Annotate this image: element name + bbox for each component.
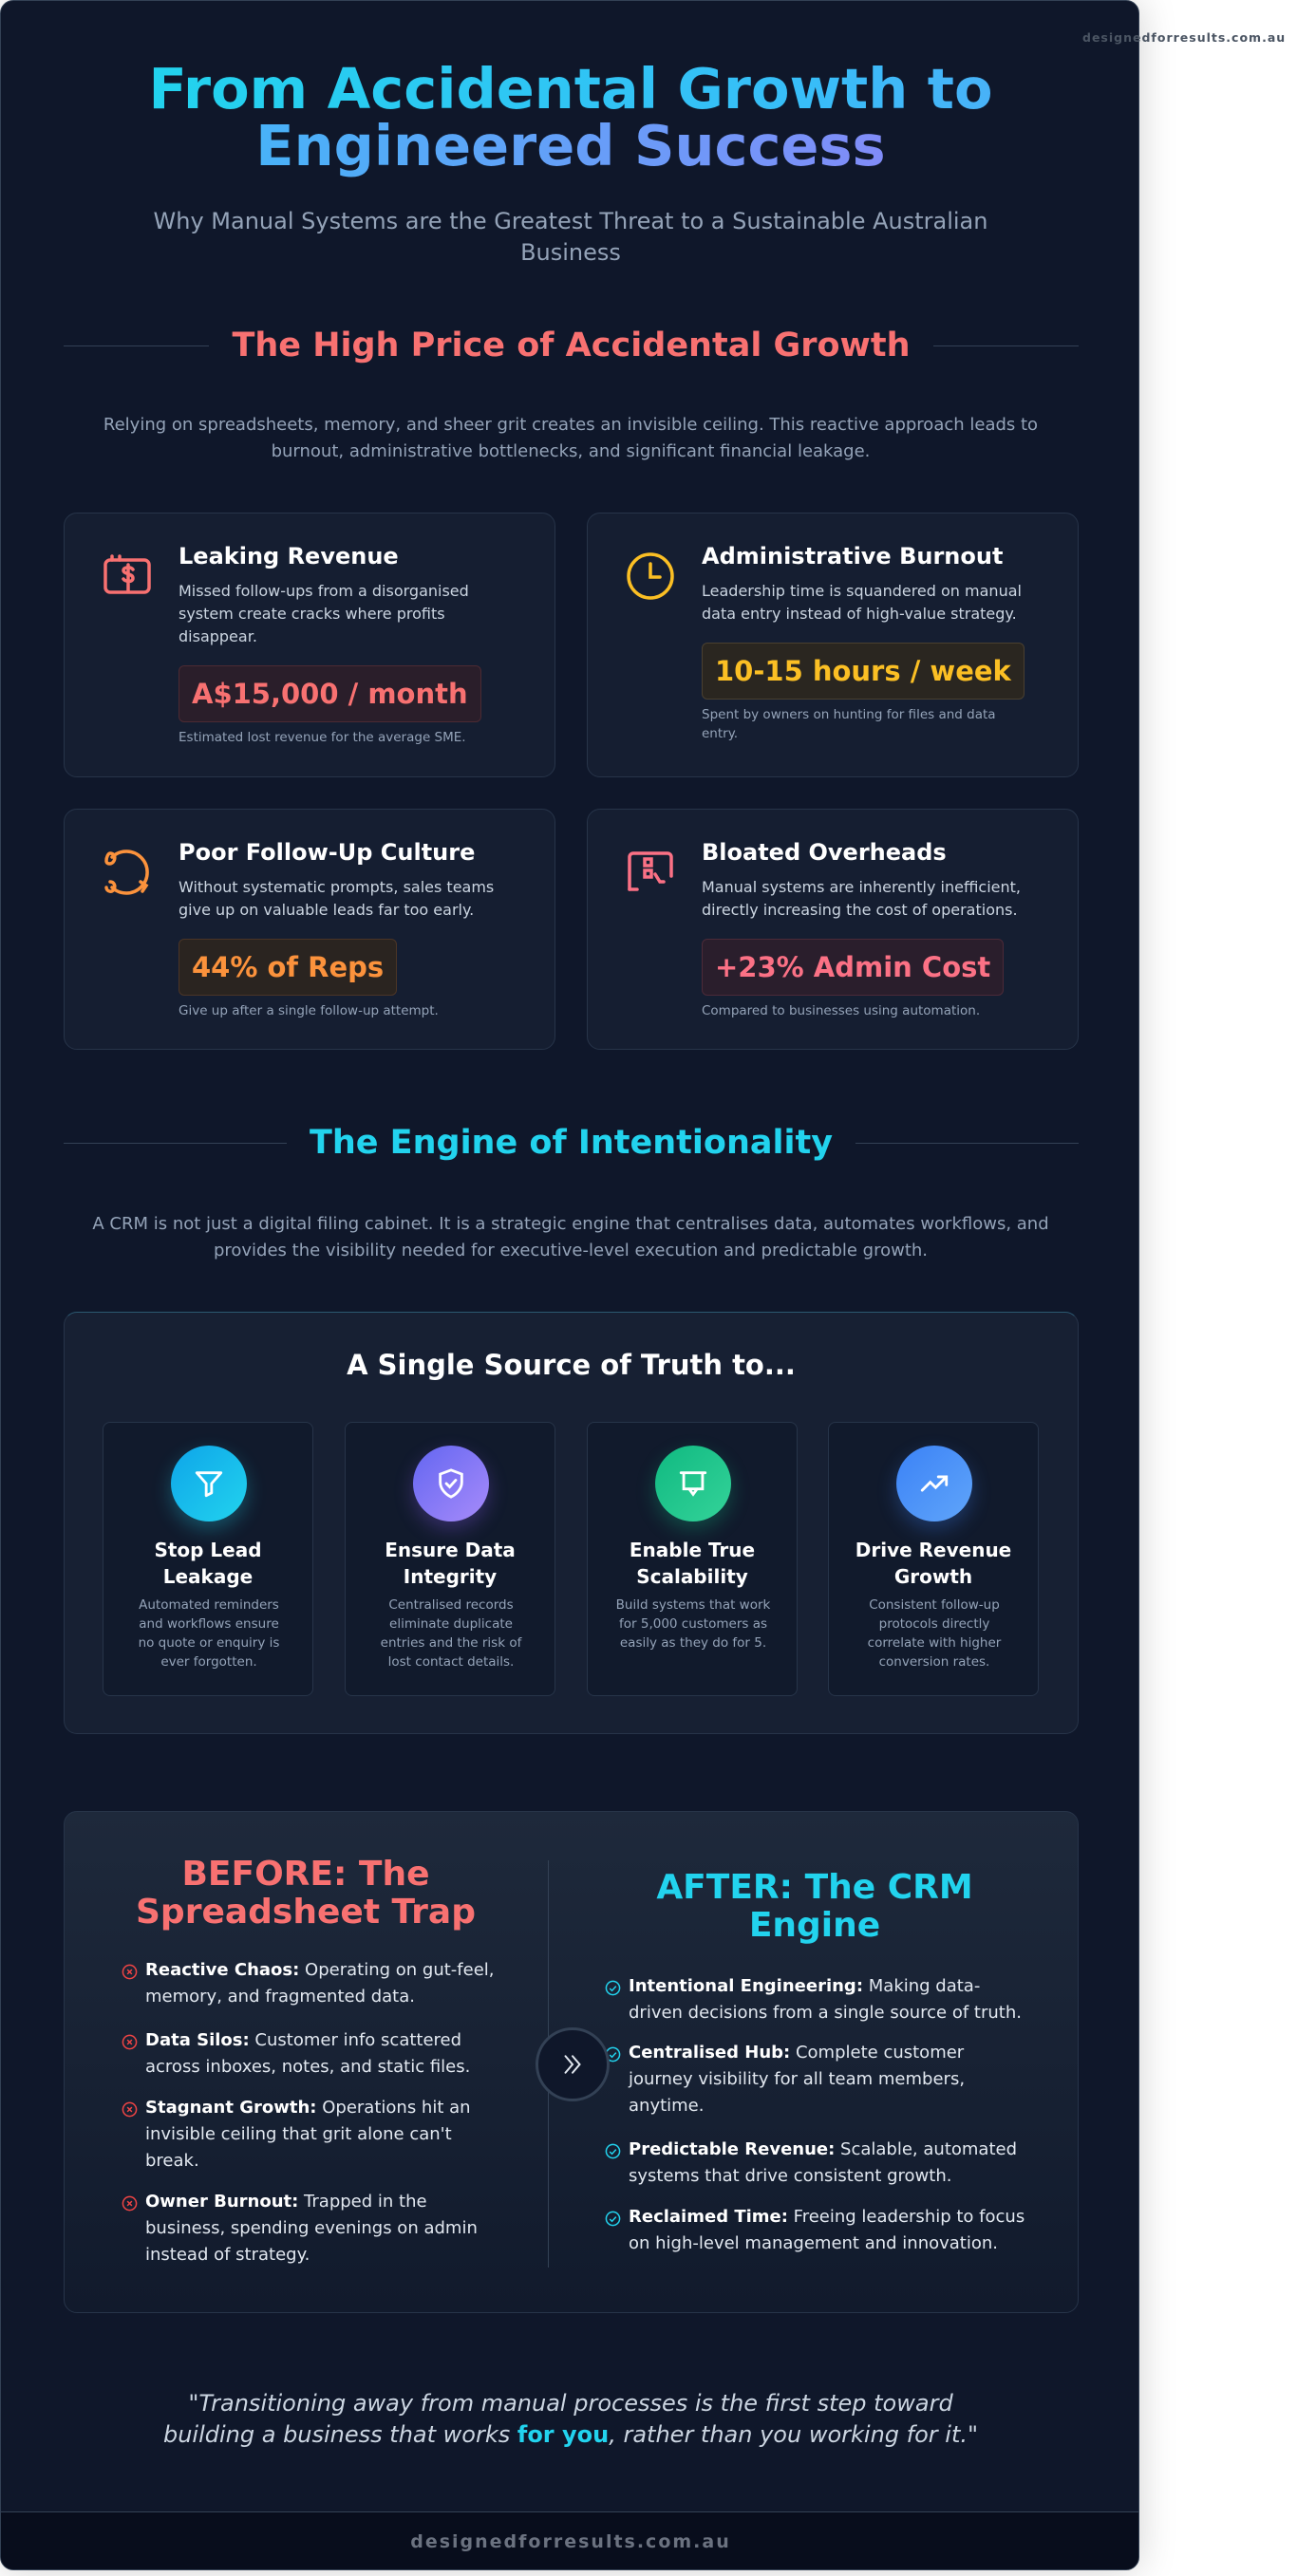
before heading bbox=[136, 1855, 476, 1932]
before heading: BEFORE: The bbox=[181, 1855, 430, 1894]
note: Compared to businesses using automation. bbox=[702, 1003, 980, 1018]
text: Missed follow-ups from a disorganised system create cracks where profits disappear. bbox=[179, 582, 469, 645]
panel: follow-up culture bbox=[64, 809, 555, 1050]
icon: building bbox=[628, 851, 673, 891]
card: revenue growth bbox=[828, 1422, 1039, 1696]
before list: Data Silos: Customer info scattered across inboxes, notes, and static files. bbox=[145, 2030, 470, 2077]
title: Engineered Success bbox=[255, 113, 886, 178]
panel: before / after bbox=[64, 1811, 1079, 2313]
section heading: engine: The Engine of Intentionality bbox=[310, 1124, 833, 1162]
card: data integrity: Integrity bbox=[404, 1565, 497, 1588]
quote: building a business that works for you, rather than you working for it." bbox=[163, 2421, 978, 2448]
heading: Administrative Burnout bbox=[702, 543, 1003, 569]
note: Estimated lost revenue for the average SME. bbox=[179, 730, 466, 745]
after heading: AFTER: The CRM bbox=[656, 1868, 973, 1907]
card: stop lead leakage: Stop Lead bbox=[154, 1539, 262, 1561]
after list bbox=[606, 1976, 1025, 2253]
before list bbox=[122, 1960, 494, 2265]
icon: shield bbox=[413, 1446, 489, 1521]
quote: "Transitioning away from manual processes is the first step toward bbox=[188, 2390, 953, 2417]
stat: A$15,000 / month bbox=[192, 678, 468, 710]
engine paragraph: A CRM is not just a digital filing cabinet. It is a strategic engine that centralises data, automates workflows, and provides the visibility needed for executive-level execution and predictable growth. bbox=[92, 1214, 1049, 1260]
card: data integrity: Ensure Data bbox=[385, 1539, 516, 1561]
note: Give up after a single follow-up attempt. bbox=[179, 1003, 439, 1018]
panel: admin burnout bbox=[587, 513, 1079, 777]
icon: monitor bbox=[655, 1446, 731, 1521]
card: data integrity bbox=[345, 1422, 555, 1696]
card: revenue growth: Drive Revenue bbox=[855, 1539, 1011, 1561]
heading: A Single Source of Truth to... bbox=[347, 1349, 796, 1381]
quote bbox=[163, 2390, 978, 2448]
heading: Bloated Overheads bbox=[702, 839, 947, 866]
before heading: Spreadsheet Trap bbox=[136, 1893, 476, 1932]
icon: money bbox=[103, 554, 151, 594]
panel: leaking revenue bbox=[64, 513, 555, 777]
text: Without systematic prompts, sales teams give up on valuable leads far too early. bbox=[179, 878, 494, 919]
stat bbox=[702, 643, 1025, 700]
watermark: designedforresults.com.au bbox=[1082, 30, 1286, 45]
note: Spent by owners on hunting for files and data entry. bbox=[702, 707, 996, 741]
before list: Stagnant Growth: Operations hit an invisible ceiling that grit alone can't break. bbox=[145, 2098, 471, 2171]
card: revenue growth: Consistent follow-up protocols directly correlate with higher conversion rates. bbox=[868, 1597, 1001, 1670]
section heading: high price: The High Price of Accidental Growth bbox=[232, 327, 911, 364]
before list: Owner Burnout: Trapped in the business, spending evenings on admin instead of strategy. bbox=[145, 2192, 478, 2265]
stat: 10-15 hours / week bbox=[715, 655, 1011, 687]
icon: loop bbox=[104, 849, 149, 895]
intro paragraph: Relying on spreadsheets, memory, and sheer grit creates an invisible ceiling. This reactive approach leads to burnout, administrative bottlenecks, and significant financial leakage. bbox=[103, 415, 1038, 461]
before list: Reactive Chaos: Operating on gut-feel, memory, and fragmented data. bbox=[145, 1960, 494, 2007]
after list: Intentional Engineering: Making data-driven decisions from a single source of truth. bbox=[629, 1976, 1022, 2023]
heading: Poor Follow-Up Culture bbox=[179, 839, 475, 866]
heading: Leaking Revenue bbox=[179, 543, 399, 569]
divider bbox=[548, 1860, 549, 2268]
after list: Predictable Revenue: Scalable, automated systems that drive consistent growth. bbox=[629, 2139, 1017, 2186]
stat: +23% Admin Cost bbox=[715, 951, 990, 983]
card: revenue growth: Growth bbox=[894, 1565, 972, 1588]
card: stop lead leakage: Automated reminders and workflows ensure no quote or enquiry is ever forgotten. bbox=[139, 1597, 279, 1670]
card: scalability: Build systems that work for 5,000 customers as easily as they do for 5. bbox=[616, 1597, 770, 1651]
card: scalability: Scalability bbox=[636, 1565, 748, 1588]
after list: Reclaimed Time: Freeing leadership to focus on high-level management and innovation. bbox=[629, 2207, 1025, 2253]
card: stop lead leakage: Leakage bbox=[163, 1565, 253, 1588]
card: data integrity: Centralised records eliminate duplicate entries and the risk of lost contact details. bbox=[381, 1597, 521, 1670]
footer bbox=[1, 2511, 1140, 2571]
text: Leadership time is squandered on manual data entry instead of high-value strategy. bbox=[702, 582, 1022, 623]
panel: bloated overheads bbox=[587, 809, 1079, 1050]
card: scalability: Enable True bbox=[630, 1539, 755, 1561]
text: Manual systems are inherently inefficient, directly increasing the cost of operations. bbox=[702, 878, 1021, 919]
after list: Centralised Hub: Complete customer journey visibility for all team members, anytime. bbox=[629, 2043, 965, 2116]
after heading bbox=[656, 1868, 973, 1945]
stat bbox=[179, 665, 481, 722]
after heading: Engine bbox=[749, 1906, 880, 1945]
panel: single source of truth bbox=[64, 1312, 1079, 1734]
stat bbox=[702, 939, 1004, 996]
stat bbox=[179, 939, 397, 996]
card: scalability bbox=[587, 1422, 798, 1696]
subtitle: Why Manual Systems are the Greatest Threat to a Sustainable Australian Business bbox=[154, 208, 987, 266]
stat: 44% of Reps bbox=[192, 951, 384, 983]
icon: clock bbox=[627, 552, 674, 600]
footer: designedforresults.com.au bbox=[410, 2531, 731, 2552]
icon: funnel bbox=[171, 1446, 247, 1521]
title bbox=[148, 56, 993, 178]
arrow: before to after bbox=[536, 2027, 610, 2101]
card: stop lead leakage bbox=[103, 1422, 313, 1696]
icon: trend bbox=[896, 1446, 972, 1521]
title: From Accidental Growth to bbox=[148, 56, 993, 121]
